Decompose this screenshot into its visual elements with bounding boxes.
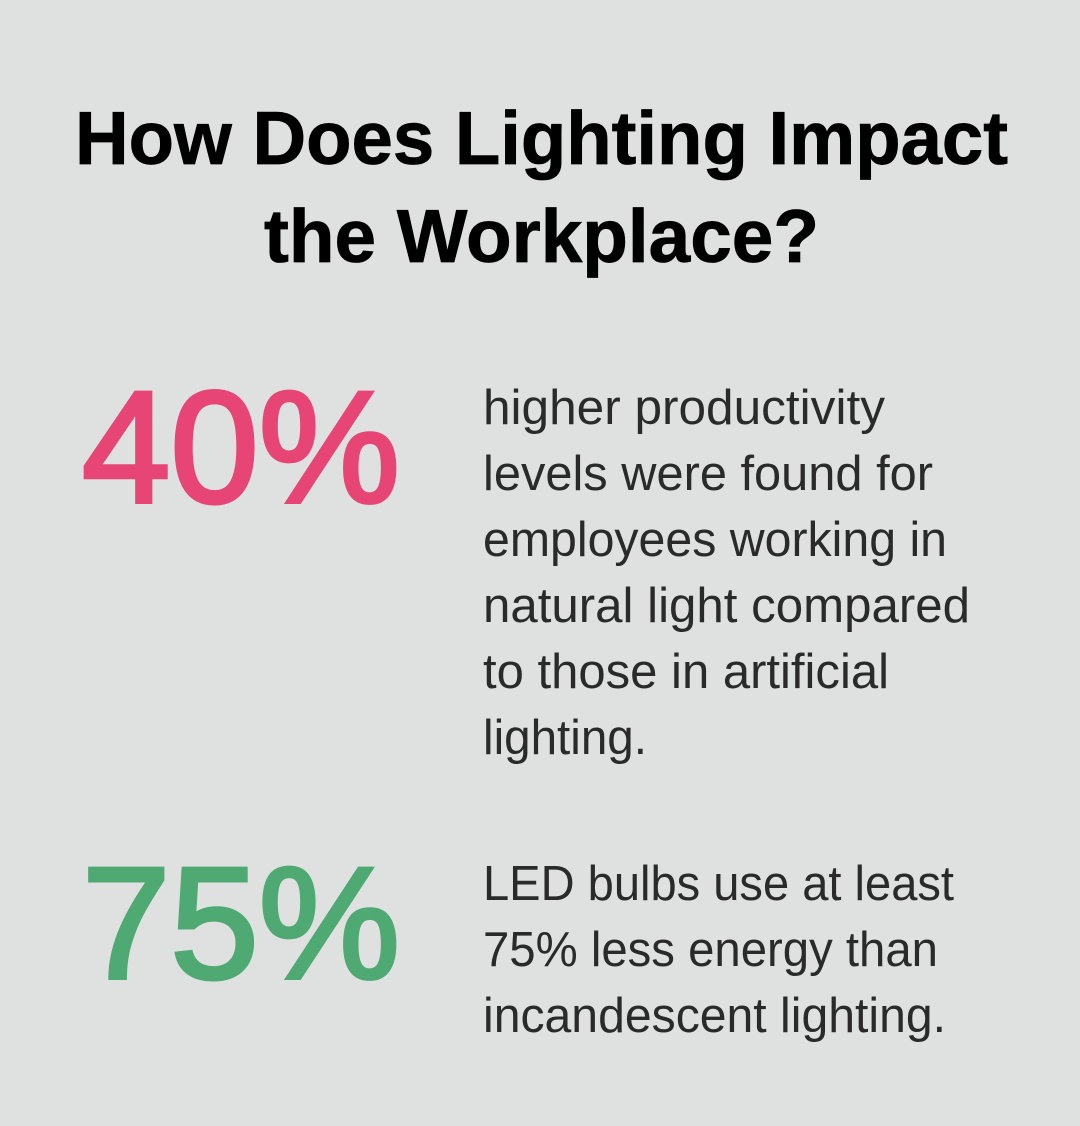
stat: 40%: 40%	[82, 358, 400, 536]
text block: natural light productivity: to those in artificial	[483, 645, 889, 699]
text block: natural light productivity: lighting.	[483, 711, 647, 765]
text block: natural light productivity: employees working in	[483, 513, 947, 567]
text block: natural light productivity	[483, 381, 970, 765]
title	[75, 96, 1008, 278]
text block: LED energy use: LED bulbs use at least	[483, 857, 954, 911]
text block: LED energy use: incandescent lighting.	[483, 989, 946, 1043]
stat: 75%: 75%	[82, 834, 400, 1012]
text block: LED energy use: 75% less energy than	[483, 923, 938, 977]
text block: LED energy use	[483, 857, 954, 1043]
title: How Does Lighting Impact	[75, 96, 1008, 180]
text block: natural light productivity: levels were found for	[483, 447, 933, 501]
text block: natural light productivity: natural light compared	[483, 579, 970, 633]
title: the Workplace?	[264, 194, 819, 278]
text block: natural light productivity: higher productivity	[483, 381, 885, 435]
